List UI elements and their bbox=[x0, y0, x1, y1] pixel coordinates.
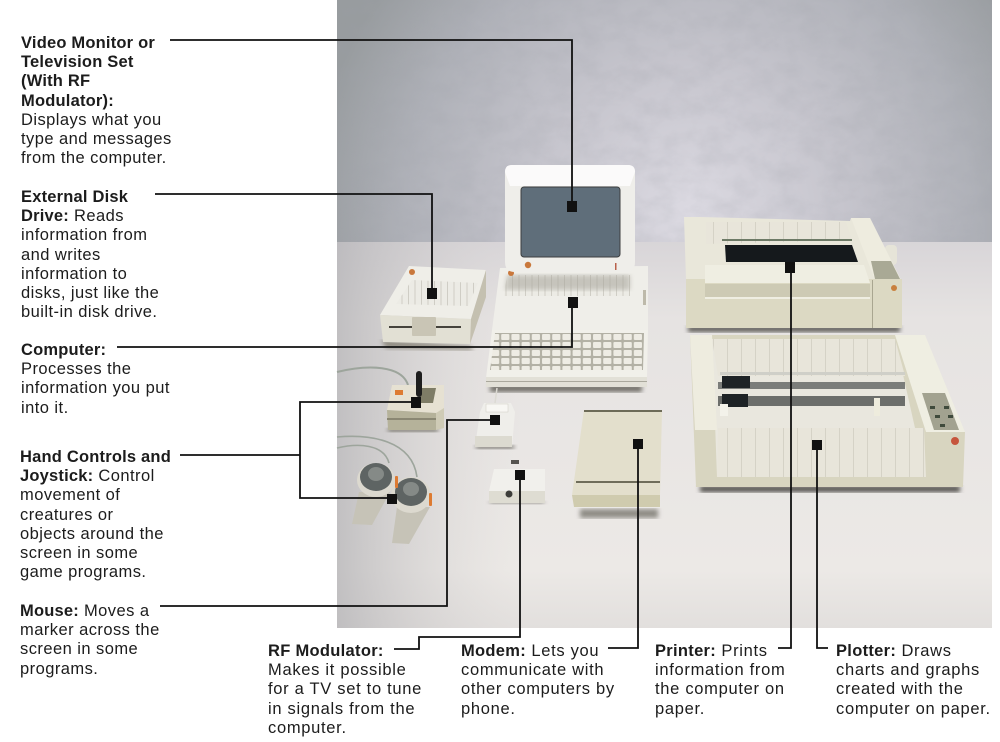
label: modem bbox=[461, 642, 615, 718]
label: mouse: Mouse: Moves a bbox=[20, 602, 150, 620]
label: modem: communicate with bbox=[461, 661, 604, 679]
leader: computer bbox=[117, 303, 572, 347]
marker squares bbox=[387, 201, 822, 504]
hand controls bbox=[337, 436, 432, 544]
label: RF modulator: for a TV set to tune bbox=[268, 680, 422, 698]
icon: apple logo bbox=[525, 262, 531, 268]
label: video monitor: Modulator): bbox=[21, 92, 114, 110]
label: hand controls and joystick: creatures or bbox=[20, 506, 113, 524]
label: computer: into it. bbox=[21, 399, 69, 417]
leader lines and markers bbox=[117, 40, 828, 649]
label: video monitor: from the computer. bbox=[21, 149, 167, 167]
leader: printer bbox=[778, 267, 791, 648]
label: hand controls and joystick: game programs. bbox=[20, 563, 146, 581]
leader: plotter bbox=[817, 445, 828, 648]
label: video monitor: Video Monitor or bbox=[21, 34, 155, 52]
label: RF modulator: computer. bbox=[268, 719, 347, 737]
label: RF modulator: Makes it possible bbox=[268, 661, 406, 679]
leader: video monitor bbox=[170, 40, 572, 206]
label: RF modulator: RF Modulator: bbox=[268, 642, 384, 660]
modem bbox=[489, 460, 545, 504]
label: mouse: programs. bbox=[20, 660, 98, 678]
label: plotter: created with the bbox=[836, 680, 964, 698]
external drive: flat disk unit bbox=[572, 410, 662, 518]
label: modem: phone. bbox=[461, 700, 516, 718]
label: computer: Computer: bbox=[21, 341, 106, 359]
label: hand controls and joystick: Hand Controls and bbox=[20, 448, 171, 466]
label: modem: Modem: Lets you bbox=[461, 642, 599, 660]
label: video monitor: type and messages bbox=[21, 130, 172, 148]
label: video monitor: Displays what you bbox=[21, 111, 162, 129]
label: hand controls and joystick: objects around the bbox=[20, 525, 164, 543]
label: printer: the computer on bbox=[655, 680, 785, 698]
label: plotter: Plotter: Draws bbox=[836, 642, 952, 660]
label: hand controls and joystick: movement of bbox=[20, 486, 120, 504]
label: RF modulator: in signals from the bbox=[268, 700, 415, 718]
label: RF modulator bbox=[268, 642, 422, 737]
leader: external disk drive bbox=[155, 194, 432, 293]
external disk drive bbox=[380, 266, 486, 350]
label: external disk drive bbox=[21, 188, 159, 321]
leader: mouse bbox=[160, 420, 495, 606]
label: hand controls and joystick: Joystick: Control bbox=[20, 467, 155, 485]
photo background: wall and floor bbox=[337, 0, 992, 628]
plotter bbox=[690, 335, 965, 492]
label: external disk drive: External Disk bbox=[21, 188, 128, 206]
mouse bbox=[475, 388, 515, 449]
label: external disk drive: built-in disk drive. bbox=[21, 303, 157, 321]
label: video monitor: Television Set bbox=[21, 53, 134, 71]
joystick bbox=[337, 368, 444, 432]
label: printer: information from bbox=[655, 661, 785, 679]
label: plotter bbox=[836, 642, 991, 718]
label: mouse: screen in some bbox=[20, 640, 138, 658]
label: video monitor bbox=[21, 34, 172, 167]
video monitor bbox=[505, 165, 635, 272]
printer control panel bbox=[871, 261, 900, 279]
label: mouse bbox=[20, 602, 160, 678]
label: computer: information you put bbox=[21, 379, 170, 397]
label: external disk drive: and writes bbox=[21, 246, 101, 264]
label: mouse: marker across the bbox=[20, 621, 160, 639]
label: video monitor: (With RF bbox=[21, 72, 90, 90]
leader: modem bbox=[608, 444, 638, 648]
label: computer bbox=[21, 341, 170, 417]
computer: Apple IIc with keyboard bbox=[486, 266, 648, 392]
label: hand controls and joystick bbox=[20, 448, 171, 581]
leader: RF modulator bbox=[394, 475, 520, 649]
label: printer: paper. bbox=[655, 700, 705, 718]
label: external disk drive: information from bbox=[21, 226, 147, 244]
label: modem: other computers by bbox=[461, 680, 615, 698]
label: hand controls and joystick: screen in some bbox=[20, 544, 138, 562]
leader: hand controls and joystick bbox=[180, 402, 416, 498]
label: computer: Processes the bbox=[21, 360, 131, 378]
label: external disk drive: information to bbox=[21, 265, 127, 283]
label: external disk drive: disks, just like the bbox=[21, 284, 159, 302]
label: printer: Printer: Prints bbox=[655, 642, 768, 660]
label: external disk drive: Drive: Reads bbox=[21, 207, 124, 225]
label: plotter: charts and graphs bbox=[836, 661, 980, 679]
printer bbox=[684, 217, 902, 332]
label: plotter: computer on paper. bbox=[836, 700, 991, 718]
label: printer bbox=[655, 642, 785, 718]
